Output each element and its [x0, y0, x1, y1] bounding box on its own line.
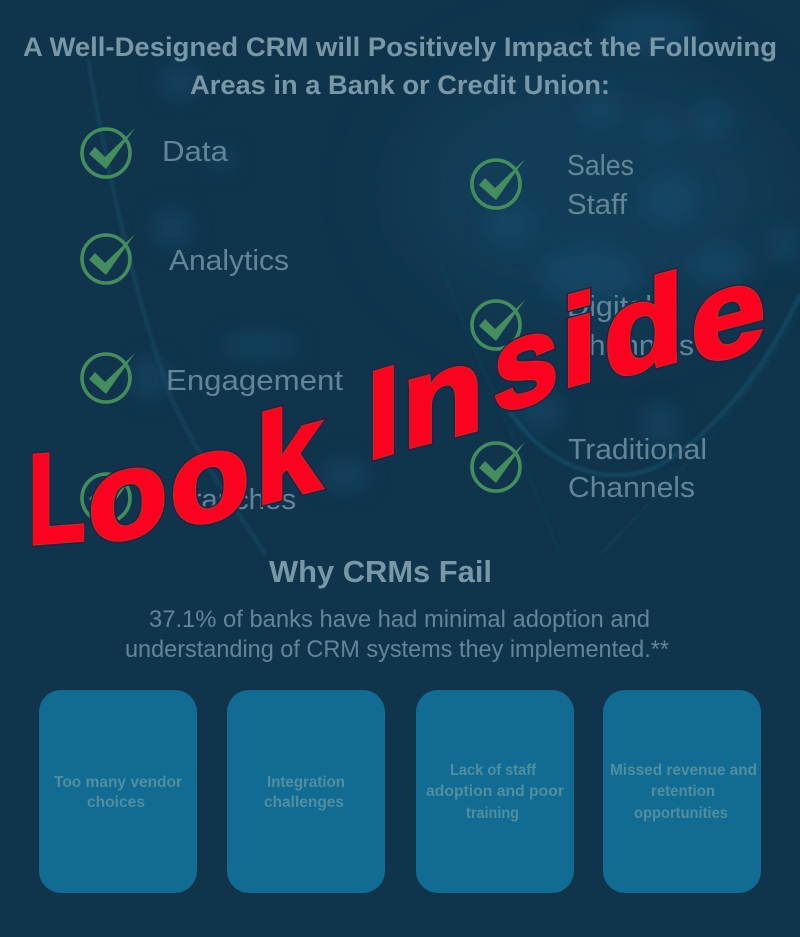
icon: check Data: [82, 128, 135, 177]
card: integration: [227, 690, 385, 893]
label: Digital Channels: [567, 291, 694, 362]
overlay: Look Inside stamp: d: [604, 248, 684, 407]
card: integration: challenges: [264, 794, 344, 811]
card: staff adoption: adoption and poor: [426, 783, 564, 800]
overlay: Look Inside stamp: i: [561, 267, 597, 415]
card: vendor choices: Too many vendor: [54, 774, 182, 791]
overlay: Look Inside stamp: n: [402, 315, 484, 475]
overlay: Look Inside stamp: I: [367, 339, 400, 487]
card: staff adoption: [416, 690, 574, 893]
label: Digital Channels: Digital: [567, 291, 652, 323]
label: Engagement: Engagement: [166, 365, 343, 397]
overlay: Look Inside stamp: I: [367, 339, 400, 487]
icon: check Traditional Channels: [472, 442, 525, 491]
overlay: Look Inside stamp: d: [604, 248, 684, 407]
overlay: Look Inside stamp: L: [28, 424, 86, 571]
overlay: Look Inside stamp: s: [493, 283, 559, 441]
card: staff adoption: Lack of staff: [450, 762, 537, 779]
label: Analytics: Analytics: [169, 245, 289, 277]
overlay: Look Inside stamp: s: [493, 283, 559, 441]
overlay: Look Inside stamp: k: [256, 377, 322, 532]
label: Digital Channels: Channels: [567, 330, 694, 362]
overlay: Look Inside stamp: s: [493, 283, 559, 441]
overlay: Look Inside stamp: d: [604, 248, 684, 407]
text: adoption statistic: understanding of CRM systems they implemented.**: [125, 636, 669, 663]
label: Sales Staff: [567, 150, 634, 221]
icon: check Engagement: [82, 353, 135, 402]
card: missed revenue: [603, 690, 761, 893]
label: Branches: Branches: [172, 484, 296, 516]
card: missed revenue: opportunities: [634, 805, 728, 822]
label: Traditional Channels: [568, 434, 707, 504]
icon: check Analytics: [82, 234, 135, 283]
overlay: Look Inside stamp: [28, 234, 765, 572]
text: adoption statistic: [125, 606, 669, 663]
label: Sales Staff: Staff: [567, 189, 628, 221]
text: adoption statistic: 37.1% of banks have had minimal adoption and: [149, 606, 650, 633]
overlay: Look Inside stamp: i: [561, 267, 597, 415]
overlay: Look Inside stamp: e: [691, 234, 765, 392]
overlay: Look Inside stamp: e: [691, 234, 765, 392]
overlay: Look Inside stamp: k: [256, 377, 322, 532]
overlay: Look Inside stamp: o: [170, 402, 250, 555]
overlay: Look Inside stamp: n: [402, 315, 484, 475]
title: [23, 32, 777, 100]
overlay: Look Inside stamp: e: [691, 234, 765, 392]
overlay: Look Inside stamp: k: [256, 377, 322, 532]
icon: check Digital Channels: [472, 300, 525, 349]
icon: check Sales Staff: [472, 159, 525, 208]
overlay: Look Inside stamp: n: [402, 315, 484, 475]
overlay: Look Inside stamp: o: [88, 419, 168, 572]
card: staff adoption: training: [466, 805, 519, 822]
label: Sales Staff: Sales: [567, 150, 634, 182]
label: Traditional Channels: Channels: [568, 472, 695, 504]
overlay: Look Inside stamp: L: [28, 424, 86, 571]
overlay: Look Inside stamp: i: [561, 267, 597, 415]
overlay: Look Inside stamp: L: [28, 424, 86, 571]
background texture: [88, 10, 800, 555]
card: missed revenue: retention: [651, 783, 715, 800]
heading: Why CRMs Fail: Why CRMs Fail: [269, 554, 492, 589]
icon: check Branches: [82, 473, 135, 522]
overlay: Look Inside stamp: o: [88, 419, 168, 572]
label: Data: Data: [162, 136, 229, 168]
overlay: Look Inside stamp: o: [88, 419, 168, 572]
overlay: Look Inside stamp: o: [170, 402, 250, 555]
title: Areas in a Bank or Credit Union:: [190, 70, 610, 100]
label: Traditional Channels: Traditional: [568, 434, 707, 466]
overlay: Look Inside stamp: o: [170, 402, 250, 555]
title: A Well-Designed CRM will Positively Impact the Following: [23, 32, 777, 62]
card: missed revenue: Missed revenue and: [610, 762, 757, 779]
card: vendor choices: [39, 690, 197, 893]
card: integration: Integration: [267, 774, 345, 791]
card: vendor choices: choices: [87, 794, 145, 811]
overlay: Look Inside stamp: I: [367, 339, 400, 487]
